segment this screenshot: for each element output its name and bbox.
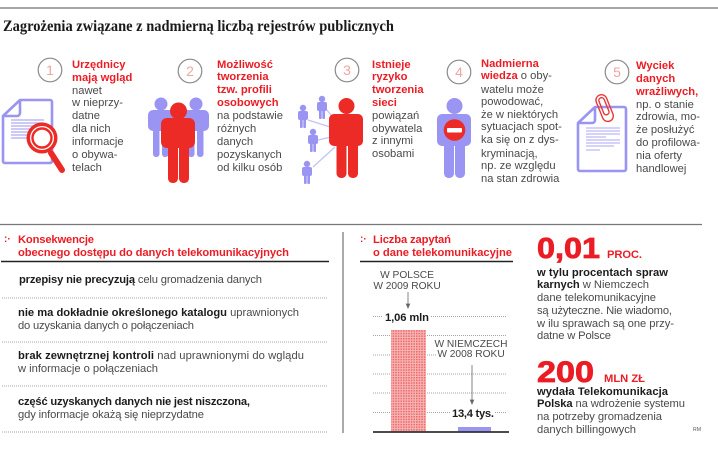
text: threat 5: wrażliwych, (635, 86, 698, 98)
value: 13,4 tys.: 13,4 tys. (452, 408, 494, 420)
panel: key figures (536, 233, 701, 436)
stat: 0,01 proc. (537, 233, 642, 265)
chart: bars (373, 316, 509, 432)
heading: queries (360, 234, 513, 262)
stat: 0,01 proc.: PROC. (607, 249, 642, 261)
text: stat 2 description: danych billingowych (537, 424, 636, 436)
stat: 200 mln zł: 200 (537, 356, 594, 389)
text: threat 4: kryminacją, (481, 148, 538, 160)
credit: RM (693, 427, 701, 433)
text: stat 1 description: w ilu sprawach są one przy- (536, 318, 674, 330)
text: threat 4: watelu może (480, 84, 544, 96)
text: stat 1 description: datne w Polsce (537, 330, 611, 342)
text: threat 1: nawet (72, 85, 103, 97)
number 1: 1 (46, 62, 54, 78)
label: Poland 2009: W POLSCE (380, 270, 434, 281)
text: stat 1 description (536, 267, 674, 342)
label: Germany 2008: W NIEMCZECH (434, 339, 508, 350)
text: stat 1 description: są użyteczne. Nie wiadomo, (537, 305, 672, 317)
text: threat 2: pozyskanych (217, 149, 282, 161)
panel: threat 4 (437, 58, 562, 185)
text: threat 1: o obywa- (72, 149, 118, 161)
text: threat 5: np. o stanie (636, 99, 694, 111)
heading: consequences: :· (4, 234, 11, 245)
panel: threat 1 (3, 58, 132, 174)
text: threat 4: na stan zdrowia (481, 173, 560, 185)
stat: 0,01 proc.: 0,01 (537, 233, 600, 265)
title: Zagrożenia związane z nadmierną liczbą rejestrów publicznych (3, 18, 394, 35)
label: Germany 2008: W 2008 ROKU (437, 349, 505, 360)
heading: consequences: Konsekwencje (18, 234, 94, 246)
text: threat 4: sytuacjach spot- (481, 121, 562, 133)
item: regulations: przepisy nie precyzują celu gromadzenia danych (19, 274, 262, 286)
text: threat 3: z innymi (372, 135, 413, 147)
text: threat 3 (372, 59, 424, 160)
text: threat 1: mają wgląd (72, 72, 132, 84)
text: threat 3: ryzyko (372, 71, 408, 83)
text: stat 2 description (536, 386, 685, 436)
number 5: 5 (613, 64, 621, 80)
text: threat 3: Istnieje (372, 59, 411, 71)
text: threat 5: nia oferty (636, 150, 682, 162)
arrow: Poland (406, 292, 410, 308)
text: threat 2 (217, 59, 283, 174)
item: external control (17, 350, 304, 375)
label: Germany 2008 (434, 336, 508, 360)
text: threat 3: powiązań (372, 110, 419, 122)
text: stat 1 description: dane telekomunikacyjne (537, 292, 656, 304)
text: threat 1: telach (72, 162, 102, 174)
heading: queries: Liczba zapytań (373, 234, 451, 246)
text: threat 1 (71, 59, 132, 174)
item: data not destroyed: gdy informacje okażą się nieprzydatne (18, 409, 204, 421)
text: threat 4: że w niektórych (481, 109, 558, 121)
text: threat 5: Wyciek (636, 60, 675, 72)
text: threat 4: powodować, (481, 96, 543, 108)
text: threat 5: że posłużyć (636, 124, 695, 136)
text: threat 4: np. ze względu (481, 160, 556, 172)
text: threat 2: tworzenia (217, 71, 269, 83)
item: catalogue: do uzyskania danych o połączeniach (18, 320, 194, 332)
text: threat 5: handlowej (636, 163, 686, 175)
text: threat 1: dla nich (72, 123, 111, 135)
panel: queries chart (360, 234, 513, 432)
text: threat 5 (635, 60, 700, 175)
heading: queries: :· (360, 234, 367, 245)
bar: Poland (391, 330, 426, 432)
text: stat 2 description: Polska na wdrożenie systemu (537, 398, 685, 410)
item: external control: w informacje o połączeniach (17, 363, 158, 375)
text: threat 5: do profilowa- (636, 137, 700, 149)
icon: network of people (298, 96, 363, 184)
panel: threat 5 (578, 60, 700, 175)
text: threat 4: ka się on z dys- (481, 134, 559, 146)
number 3: 3 (343, 62, 351, 78)
text: stat 2 description: wydała Telekomunikacja (536, 386, 669, 398)
text: threat 4 (480, 58, 562, 185)
stat: 200 mln zł (537, 356, 645, 389)
text: threat 2: danych (217, 136, 253, 148)
heading: consequences: obecnego dostępu do danych telekomunikacyjnych (18, 247, 289, 259)
text: threat 1: datne (72, 110, 100, 122)
text: threat 1: w nieprzy- (71, 97, 123, 109)
text: threat 4: Nadmierna (481, 58, 540, 70)
icon: document with magnifier (3, 100, 62, 170)
number 2: 2 (186, 63, 194, 79)
icon: three people (148, 98, 209, 183)
text: threat 1: informacje (72, 136, 124, 148)
item: catalogue: nie ma dokładnie określonego katalogu uprawnionych (18, 307, 299, 319)
number 4: 4 (455, 64, 463, 80)
stat: 200 mln zł: MLN ZŁ (604, 373, 645, 385)
panel: consequences (1, 234, 329, 432)
heading: queries: o dane telekomunikacyjne (373, 247, 512, 259)
text: threat 2: od kilku osób (217, 162, 282, 174)
text: threat 3: sieci (372, 97, 397, 109)
item: catalogue (18, 307, 299, 332)
bar: Germany (458, 427, 491, 432)
icon: person with no-entry sign (437, 98, 471, 178)
text: threat 3: osobami (372, 148, 414, 160)
text: threat 5: danych (636, 73, 675, 85)
text: threat 2: różnych (217, 123, 256, 135)
text: threat 3: obywatela (372, 123, 423, 135)
label: Poland 2009 (373, 270, 441, 292)
item: data not destroyed (18, 396, 250, 421)
item: data not destroyed: część uzyskanych danych nie jest niszczona, (18, 396, 250, 408)
arrow: Germany (470, 365, 474, 404)
item: external control: brak zewnętrznej kontroli nad uprawnionymi do wglądu (18, 350, 304, 362)
text: threat 2: tzw. profili (217, 84, 272, 96)
text: threat 5: zdrowia, mo- (636, 111, 700, 123)
text: stat 1 description: w tylu procentach spraw (536, 267, 668, 279)
heading: consequences (1, 234, 329, 262)
text: threat 2: na podstawie (217, 110, 283, 122)
value: 1,06 mln: 1,06 mln (385, 312, 429, 324)
icon: document with paperclip (578, 93, 626, 171)
text: threat 3: tworzenia (372, 84, 424, 96)
panel: threat 2 (148, 59, 283, 183)
text: threat 2: osobowych (217, 97, 279, 109)
text: threat 1: Urzędnicy (72, 59, 126, 71)
text: threat 2: Możliwość (217, 59, 273, 71)
label: Poland 2009: W 2009 ROKU (373, 281, 441, 292)
panel: threat 3 (298, 58, 424, 184)
text: stat 2 description: na potrzeby gromadzenia (537, 411, 663, 423)
text: stat 1 description: karnych w Niemczech (537, 279, 649, 291)
text: threat 4: wiedza o oby- (480, 70, 552, 82)
